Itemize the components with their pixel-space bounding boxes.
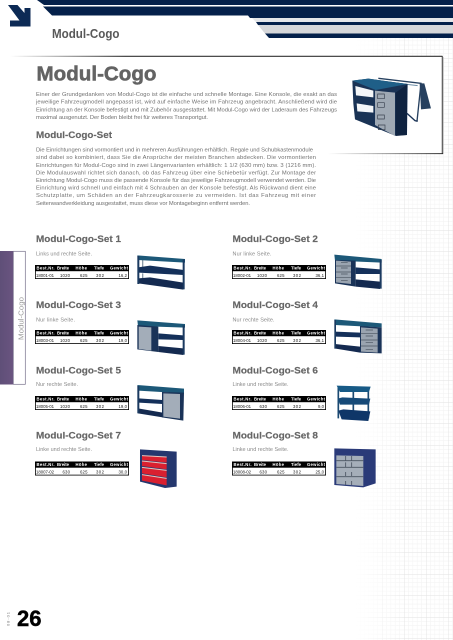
table: set 6: Tiefe — [291, 397, 302, 402]
panel: set 4: Nur rechte Seite. — [232, 317, 275, 323]
table: set 2: Höhe — [272, 266, 285, 271]
icon: shelf set 4 — [334, 319, 382, 353]
set description text: Seitenwandverkleidung ausgestattet, muss diese vor Montagebeginn entfernt werden. — [36, 201, 250, 207]
table: set 2: Best.Nr. — [234, 266, 252, 271]
table: set 4: 302 — [293, 338, 302, 343]
table: set 6: 18006-01 — [233, 404, 252, 409]
table: set 3: Tiefe — [94, 331, 105, 336]
table: set 1: 1020 — [60, 273, 71, 278]
table: set 1: 302 — [96, 273, 105, 278]
panel: set 1: Links und rechte Seite. — [36, 252, 92, 258]
table: set 6: Höhe — [272, 397, 285, 402]
panel: set 3 — [35, 300, 185, 355]
table: set 4 — [232, 330, 326, 344]
table: set 2: 36,1 — [316, 273, 325, 278]
panel: set 5: Modul-Cogo-Set 5 — [36, 366, 122, 376]
icon: hero product photo — [352, 78, 431, 136]
panel: set 1: Modul-Cogo-Set 1 — [36, 234, 122, 245]
table: set 5: Tiefe — [94, 397, 105, 402]
icon: grey drawer unit — [334, 448, 376, 487]
table: set 1: 625 — [80, 273, 88, 278]
table: set 6: 9,0 — [318, 404, 325, 409]
table: set 6: Breite — [254, 397, 267, 402]
set description text: Einrichtung wird schnell und einfach mit 4 Schrauben an der Konsole befestigt. Als Rückwand dient eine — [36, 186, 316, 192]
table: set 4: Gewicht — [307, 331, 326, 336]
footer code: 08-01 — [6, 611, 10, 626]
panel: set 7: Modul-Cogo-Set 7 — [36, 430, 121, 442]
table: set 5: 18005-01 — [36, 404, 55, 409]
intro text: Einrichtung an der Konsole befestigt und mit Zubehör ausgestattet. Mit Modul-Cogo wird der Laderaum des Fahrzeugs — [36, 108, 337, 114]
table: set 5: 625 — [80, 404, 88, 409]
table: set 3: 625 — [80, 338, 88, 343]
table: set 1: Gewicht — [110, 266, 129, 271]
panel: set 6 — [232, 366, 371, 421]
panel: set 6: Modul-Cogo-Set 6 — [232, 366, 318, 376]
page number: 26 — [17, 606, 41, 631]
table: set 3 — [35, 330, 129, 344]
panel: set 2: Nur linke Seite. — [232, 252, 272, 258]
table: set 6: 630 — [260, 404, 268, 409]
table: set 2: Tiefe — [291, 266, 302, 271]
panel: set 1 — [35, 234, 185, 290]
table: set 4: Tiefe — [291, 331, 302, 336]
table: set 7: 18007-02 — [36, 470, 55, 474]
table: set 5: 302 — [96, 404, 105, 409]
table: set 7: 302 — [96, 470, 105, 474]
side tab — [0, 251, 25, 384]
table: set 6: Gewicht — [307, 397, 326, 402]
table: set 1 — [35, 265, 129, 279]
icon: red drawer unit — [140, 449, 177, 488]
panel: set 5: Nur rechte Seite. — [36, 382, 78, 388]
table: set 8: Tiefe — [291, 462, 302, 467]
table: set 8: Breite — [254, 462, 267, 467]
table: set 2: 18002-01 — [233, 273, 252, 278]
table: set 5 — [35, 396, 129, 410]
panel: set 7: Linke und rechte Seite. — [36, 447, 92, 453]
title: Modul-Cogo — [36, 62, 156, 86]
table: set 3: 1020 — [60, 338, 71, 343]
table: set 1: Breite — [57, 266, 70, 271]
set description text: Einrichtungen für Modul-Cogo sind in zwei Längenvarianten erhältlich: 1 1/2 (630 mm) bzw. 3 (1216 mm). — [36, 163, 316, 169]
table: set 7: Best.Nr. — [36, 462, 54, 467]
table: set 2: Gewicht — [307, 266, 326, 271]
table: set 7: 625 — [80, 470, 88, 474]
panel: intro — [10, 56, 444, 154]
table: set 8: Gewicht — [307, 462, 326, 467]
set description text — [36, 148, 316, 207]
set description text: Einrichtung Modul-Cogo muss die passende Konsole für das jeweilige Fahrzeugmodell verwendet werden. Die — [36, 178, 316, 184]
table: set 7: 30,0 — [118, 470, 128, 474]
table: set 4: Best.Nr. — [234, 331, 252, 336]
set description text: Schutzplatte, um Schäden an der Fahrzeugkarosserie zu vermeiden. Ist das Fahrzeug mit einer — [36, 193, 316, 199]
table: set 8: 25,0 — [316, 470, 325, 474]
table: set 1: 18001-01 — [36, 273, 55, 278]
table: set 8: Höhe — [272, 462, 285, 467]
set description text: sind dabei so kombiniert, dass Sie die Ansprüche der meisten Branchen abdecken. Die vormontierten — [36, 155, 316, 161]
header stripes — [37, 0, 453, 38]
table: set 7: Gewicht — [110, 462, 129, 467]
table: set 6 — [232, 396, 326, 410]
table: set 4: 18004-01 — [233, 338, 252, 343]
table: set 5: 19,0 — [118, 404, 128, 409]
set description text: Die Einrichtungen sind vormontiert und in mehreren Ausführungen erhältlich. Regale und Schubkastenmodule — [36, 148, 313, 154]
table: set 4: Breite — [254, 331, 267, 336]
table: set 1: Höhe — [76, 266, 88, 271]
panel: set 7 — [35, 430, 177, 488]
table: set 8: Best.Nr. — [234, 462, 252, 467]
panel: set 8: Modul-Cogo-Set 8 — [232, 430, 319, 442]
icon: shelf set 2 — [334, 255, 382, 289]
subheading: Modul-Cogo-Set — [36, 130, 113, 141]
icon: shelf set 1 — [137, 255, 185, 290]
table: set 3: Breite — [57, 331, 70, 336]
table: set 3: Best.Nr. — [36, 331, 54, 336]
header label: Modul-Cogo — [52, 27, 120, 41]
panel: set 5 — [35, 366, 184, 421]
table: set 3: Höhe — [76, 331, 88, 336]
table: set 3: 19,0 — [118, 338, 128, 343]
table: set 2: 1020 — [257, 273, 268, 278]
icon: shelf set 3 — [137, 320, 185, 355]
panel: set 2 — [232, 234, 382, 289]
side tab: Modul-Cogo — [16, 297, 25, 340]
table: set 4: 36,1 — [316, 338, 325, 343]
table: set 6: 625 — [277, 404, 285, 409]
table: set 5: Breite — [57, 397, 70, 402]
intro text: jeweilige Fahrzeugmodell angepasst ist, wird auf einfache Weise im Fahrzeug angebracht. Anschließend wird die — [35, 100, 337, 106]
icon: shelf set 5 — [137, 385, 184, 421]
table: set 1: 16,2 — [118, 273, 128, 278]
table: set 2 — [232, 265, 326, 279]
table: set 3: 302 — [96, 338, 105, 343]
table: set 7: Tiefe — [94, 462, 105, 467]
table: set 8: 18008-02 — [233, 470, 252, 474]
panel: set 4 — [232, 300, 382, 353]
table: set 2: 302 — [293, 273, 302, 278]
table: set 7 — [35, 462, 129, 476]
table: set 5: Höhe — [76, 397, 88, 402]
table: set 7: Breite — [57, 462, 70, 467]
table: set 5: 1020 — [60, 404, 71, 409]
panel: set 2: Modul-Cogo-Set 2 — [232, 234, 318, 245]
table: set 3: 18003-01 — [36, 338, 55, 343]
table: set 5: Gewicht — [110, 397, 129, 402]
table: set 7: 630 — [62, 470, 71, 474]
table: set 2: 625 — [277, 273, 285, 278]
icon: corner arrow — [8, 5, 30, 26]
panel: set 3: Nur linke Seite. — [36, 317, 75, 323]
set description text: Die Modulauswahl richtet sich danach, ob das Fahrzeug über eine Schiebetür verfügt. Zur Montage der — [36, 170, 316, 176]
table: set 3: Gewicht — [110, 331, 129, 336]
table: set 7: Höhe — [76, 462, 88, 467]
table: set 4: Höhe — [272, 331, 285, 336]
panel: set 8 — [232, 430, 376, 487]
table: set 1: Tiefe — [94, 266, 105, 271]
table: set 2: Breite — [254, 266, 267, 271]
icon: shelf set 6 — [337, 386, 371, 421]
table: set 8: 625 — [277, 470, 285, 474]
panel: set 8: Linke und rechte Seite. — [232, 447, 289, 453]
table: set 4: 1020 — [257, 338, 268, 343]
table: set 6: 302 — [293, 404, 302, 409]
table: set 8: 302 — [293, 470, 302, 474]
panel: set 6: Linke und rechte Seite. — [232, 382, 289, 388]
table: set 8: 630 — [260, 470, 268, 474]
table: set 8 — [232, 462, 326, 476]
intro text — [35, 92, 337, 121]
table: set 5: Best.Nr. — [36, 397, 54, 402]
table: set 1: Best.Nr. — [36, 266, 54, 271]
panel: set 3: Modul-Cogo-Set 3 — [36, 300, 121, 311]
background grid — [370, 38, 453, 640]
intro text: maximal ausgenutzt. Der Boden bleibt frei für weiteres Transportgut. — [36, 115, 208, 121]
table: set 4: 625 — [277, 338, 285, 343]
table: set 6: Best.Nr. — [234, 397, 252, 402]
panel: set 4: Modul-Cogo-Set 4 — [232, 300, 319, 311]
intro text: Einer der Grundgedanken von Modul-Cogo ist die einfache und schnelle Montage. Eine Konsole, die exakt an das — [36, 92, 337, 98]
